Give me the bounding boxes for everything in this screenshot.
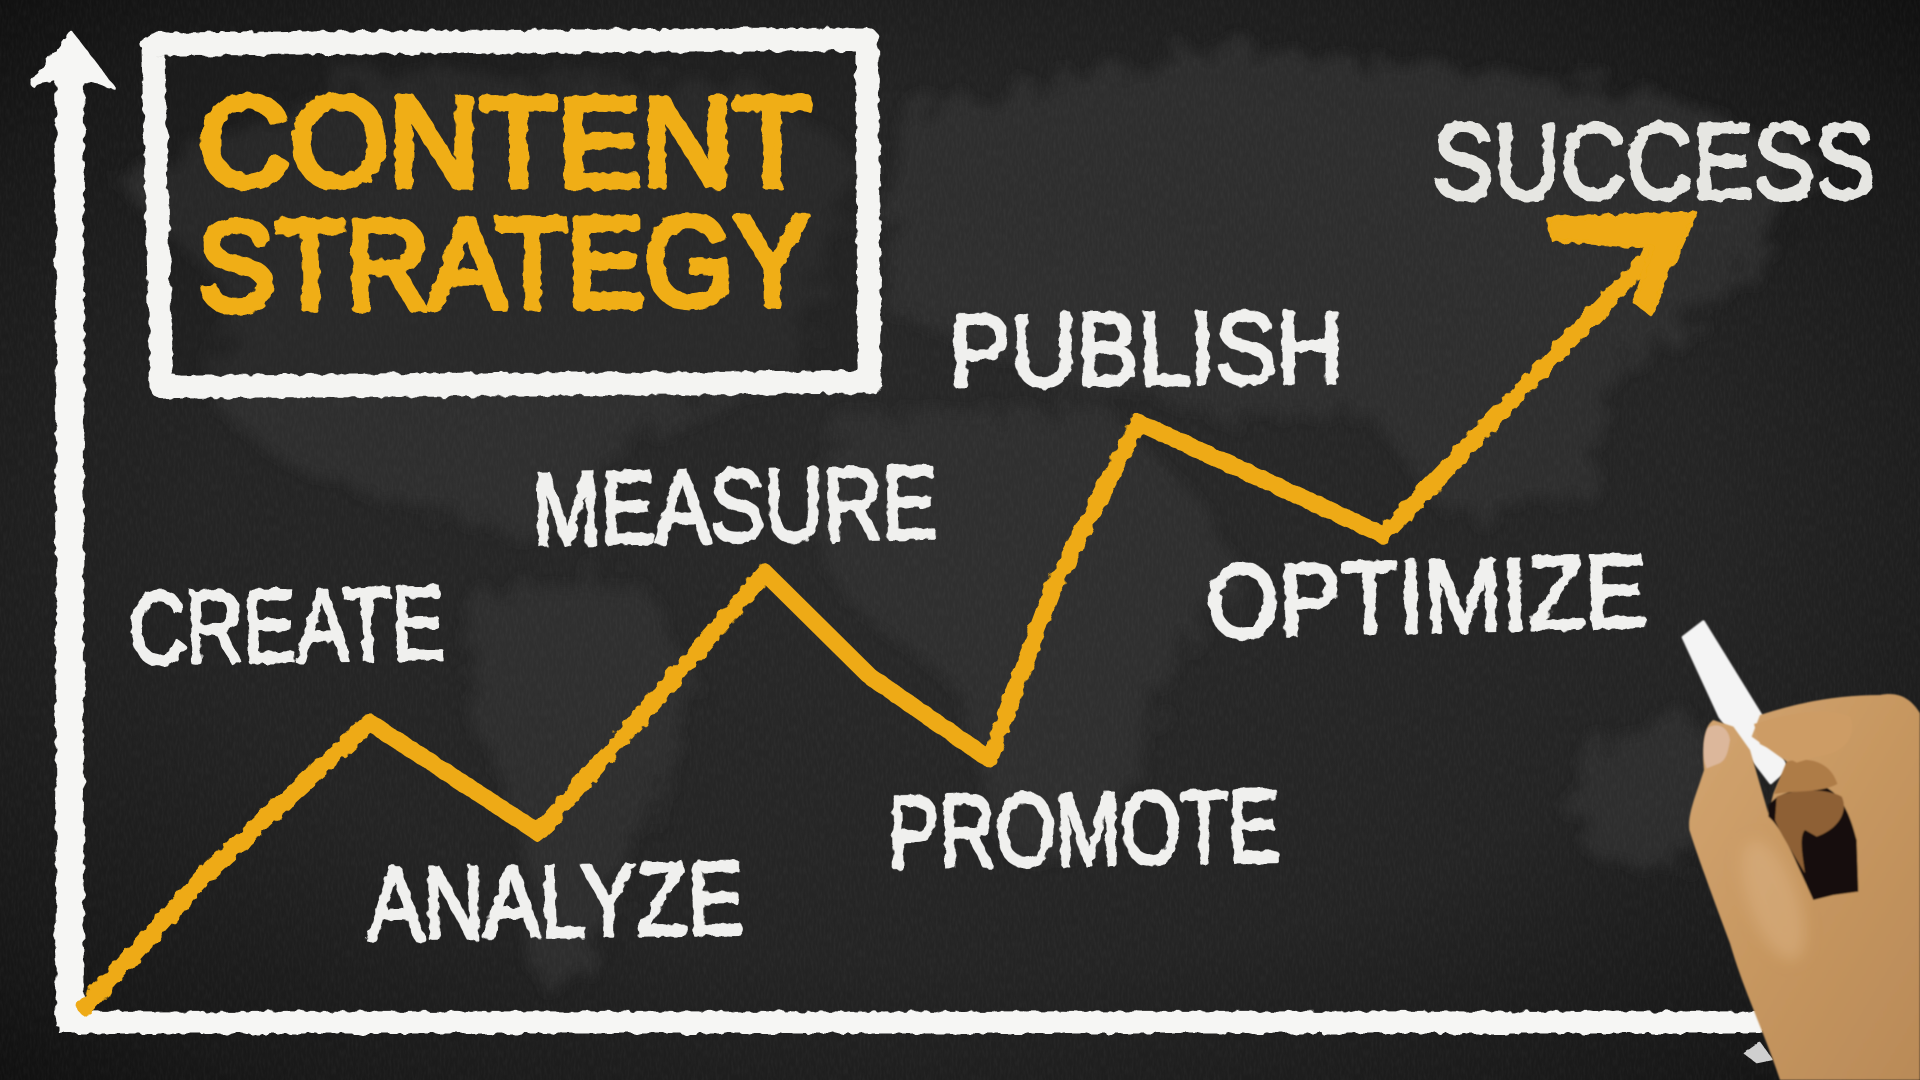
thumb nail	[1703, 725, 1730, 768]
title: strategy: STRATEGY	[198, 189, 811, 337]
world map smudges	[116, 49, 1812, 992]
palm highlight	[1728, 832, 1818, 968]
label: promote: PROMOTE	[887, 768, 1281, 890]
title box	[153, 39, 869, 387]
x axis	[59, 1013, 1763, 1031]
y axis arrow	[58, 55, 81, 1026]
index finger	[1754, 712, 1852, 763]
label: optimize: OPTIMIZE	[1205, 533, 1648, 660]
label: publish: PUBLISH	[948, 290, 1344, 408]
chalk dust near x axis	[1743, 1042, 1773, 1063]
growth line	[86, 213, 1696, 1007]
hand shape	[1689, 694, 1920, 1080]
hand holding chalk	[1683, 622, 1920, 1080]
palm hollow shadow	[1768, 783, 1858, 900]
middle finger	[1775, 790, 1844, 873]
step labels	[128, 100, 1876, 962]
growth arrow head	[1548, 213, 1696, 313]
ring finger shade	[1774, 760, 1837, 794]
label: measure: MEASURE	[532, 445, 938, 567]
label: analyze: ANALYZE	[366, 840, 744, 962]
chalk stick	[1683, 622, 1787, 783]
title: content: CONTENT	[198, 71, 811, 213]
label: create: CREATE	[128, 565, 445, 686]
